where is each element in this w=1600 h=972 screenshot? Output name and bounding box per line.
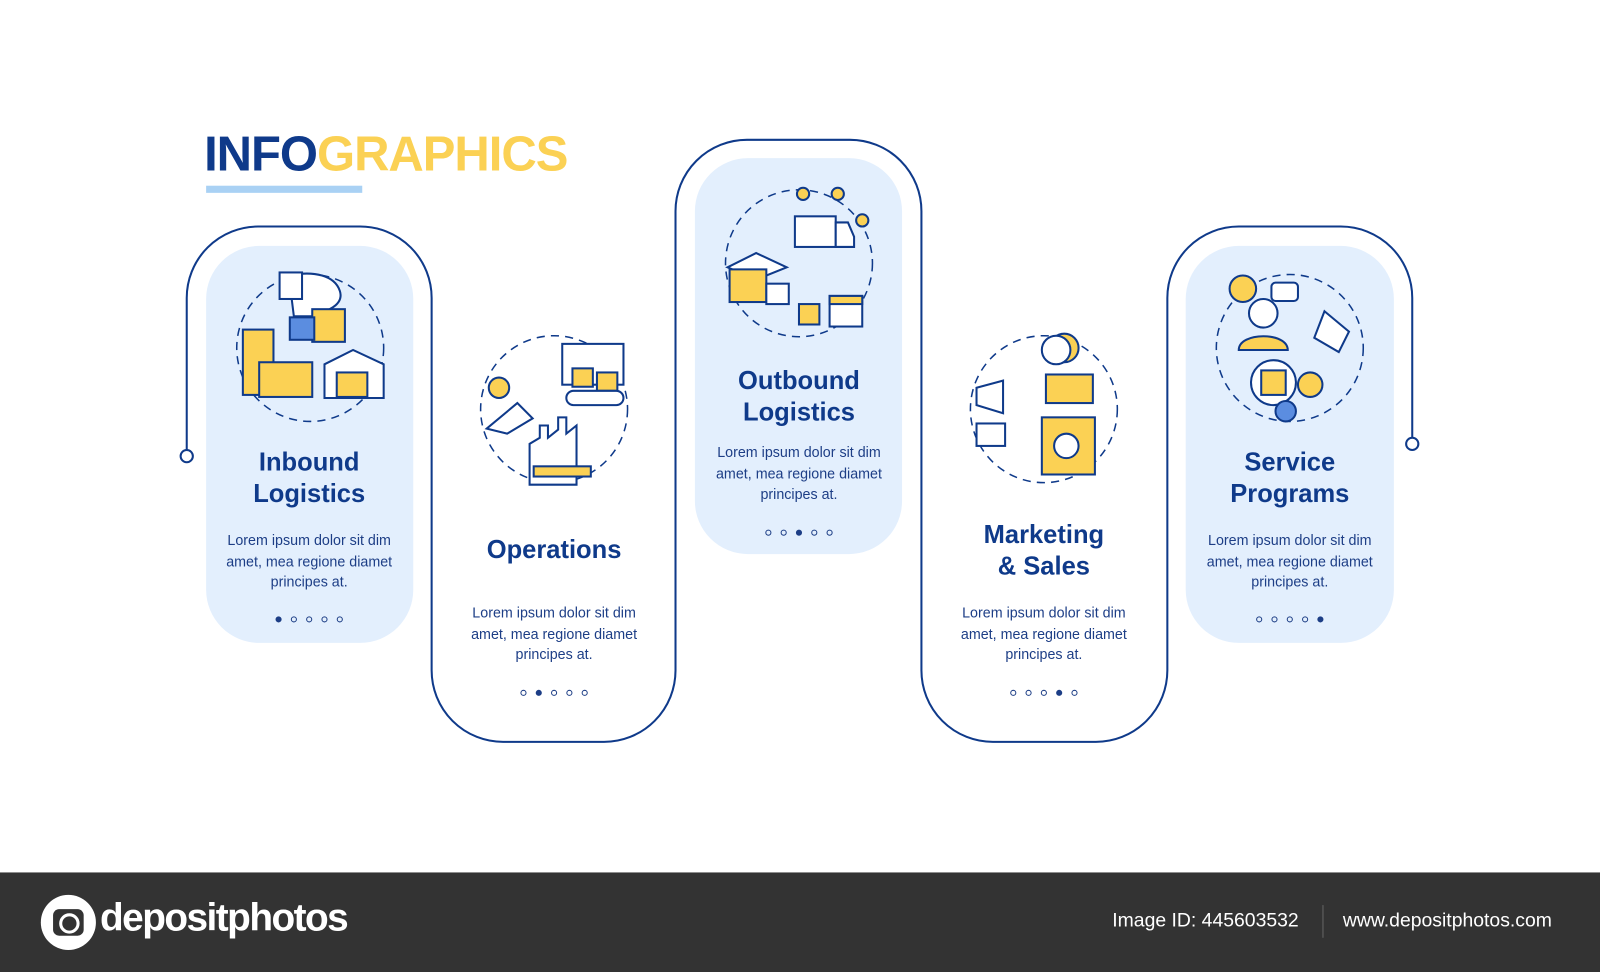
title: INFOGRAPHICS: [204, 128, 567, 182]
text block: amet, mea regione diamet: [1207, 553, 1373, 569]
text block: principes at.: [760, 486, 837, 502]
heading: Inbound: [259, 448, 359, 477]
card backgrounds: [206, 246, 413, 643]
icon: logo camera: [41, 895, 96, 950]
text block: Lorem ipsum dolor sit dim: [1208, 532, 1372, 548]
heading: Service: [1244, 448, 1335, 477]
image id: Image ID: 445603532: [1112, 910, 1299, 932]
heading: Logistics: [253, 480, 365, 508]
text block: [1207, 532, 1373, 590]
icon: outbound logistics: [724, 186, 874, 338]
text block: [226, 532, 392, 590]
text block: principes at.: [271, 573, 348, 590]
pagination dots: [276, 616, 343, 622]
text block: principes at.: [516, 646, 593, 662]
text block: amet, mea regione diamet: [716, 465, 882, 481]
icon: marketing: [970, 332, 1118, 484]
heading: [984, 520, 1104, 581]
heading: [253, 448, 365, 508]
text block: [716, 444, 882, 502]
text block: [961, 604, 1127, 662]
heading: [738, 366, 860, 427]
panel: service programs: [1207, 448, 1373, 622]
panel: operations: [471, 536, 637, 696]
text block: principes at.: [1005, 646, 1082, 662]
pagination dots: [1010, 690, 1078, 696]
pagination dots: [1256, 616, 1324, 622]
pagination dots: [520, 690, 588, 696]
icon: inbound logistics: [236, 271, 385, 422]
panel: inbound logistics: [226, 448, 392, 622]
footer bar: [0, 872, 1600, 972]
icon: service: [1216, 274, 1364, 422]
heading: [1230, 448, 1349, 508]
heading: Marketing: [984, 520, 1104, 549]
text block: amet, mea regione diamet: [226, 553, 392, 569]
website: www.depositphotos.com: [1343, 910, 1552, 932]
heading: Programs: [1230, 480, 1349, 508]
icon: operations: [480, 335, 628, 486]
panel: marketing & sales: [961, 520, 1127, 696]
text block: Lorem ipsum dolor sit dim: [962, 604, 1126, 620]
heading: Operations: [487, 536, 621, 564]
logo text: depositphotos: [100, 897, 347, 940]
panel: outbound logistics: [716, 366, 882, 536]
text block: principes at.: [1251, 573, 1328, 590]
text block: Lorem ipsum dolor sit dim: [717, 444, 881, 460]
text block: amet, mea regione diamet: [961, 625, 1127, 641]
text block: amet, mea regione diamet: [471, 625, 637, 641]
heading: Outbound: [738, 366, 860, 395]
heading: Logistics: [743, 398, 855, 427]
pagination dots: [765, 530, 833, 536]
text block: Lorem ipsum dolor sit dim: [227, 532, 391, 548]
heading: & Sales: [998, 552, 1090, 581]
text block: [471, 604, 637, 662]
text block: Lorem ipsum dolor sit dim: [472, 604, 636, 620]
